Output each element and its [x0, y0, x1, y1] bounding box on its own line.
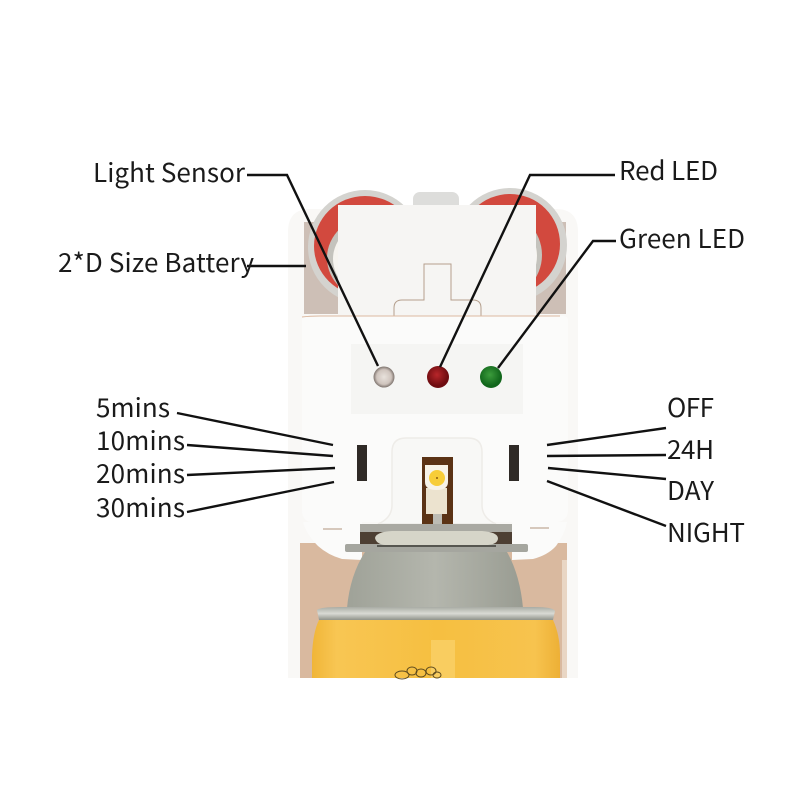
- label: 10mins: 10mins: [96, 421, 185, 458]
- label: Green LED: Green LED: [619, 219, 745, 256]
- label: 5mins: 5mins: [96, 388, 170, 425]
- can dome: [347, 552, 523, 608]
- right slide switch: [509, 445, 519, 481]
- sensor LED: [374, 366, 394, 388]
- top plate: [360, 524, 512, 532]
- actuator stem: [426, 488, 447, 514]
- leader lines: [177, 175, 666, 526]
- label: Red LED: Red LED: [619, 151, 718, 188]
- actuator head: [425, 465, 448, 490]
- dark gap: [360, 532, 512, 546]
- left slide switch: [357, 445, 367, 481]
- can rail: [345, 544, 528, 552]
- label: OFF: OFF: [667, 388, 714, 425]
- label: 2*D Size Battery: 2*D Size Battery: [58, 243, 254, 280]
- green LED: [480, 366, 502, 388]
- label: Light Sensor: Light Sensor: [93, 153, 246, 190]
- beige inner back: [300, 543, 567, 678]
- red LED: [427, 366, 449, 388]
- battery compartment: [304, 222, 566, 314]
- label: 20mins: 20mins: [96, 454, 185, 491]
- can logo: [395, 667, 441, 679]
- dispenser device: [288, 188, 578, 679]
- led panel: [351, 344, 523, 414]
- right shoulder: [512, 522, 567, 560]
- label: 24H: 24H: [667, 430, 714, 467]
- label: NIGHT: NIGHT: [667, 513, 745, 550]
- label card: [338, 205, 536, 319]
- shoulder rim: [317, 607, 555, 620]
- can crimp: [375, 531, 498, 545]
- yellow can body: [312, 620, 560, 678]
- left battery: [308, 190, 422, 304]
- label: DAY: DAY: [667, 471, 714, 508]
- label: 30mins: 30mins: [96, 488, 185, 525]
- housing back shell: [288, 209, 578, 678]
- left shoulder: [303, 522, 362, 560]
- right battery: [453, 188, 567, 302]
- top button: [413, 192, 459, 212]
- key outline: [394, 264, 481, 318]
- nozzle recess: [378, 438, 496, 524]
- yellow nozzle: [429, 470, 445, 486]
- front cover: [302, 316, 568, 522]
